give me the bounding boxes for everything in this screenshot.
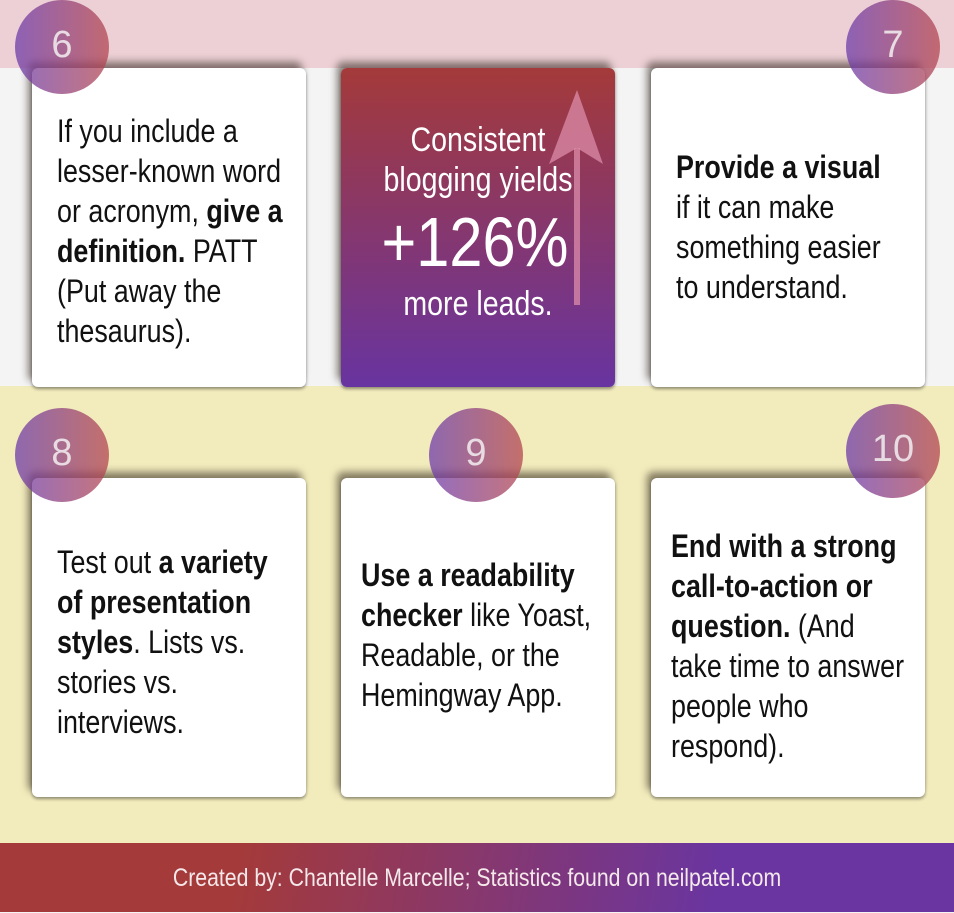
card 10: take time to answer [671, 648, 904, 684]
stat text [382, 121, 572, 323]
card 8: stories vs. [57, 664, 178, 700]
arrow [549, 90, 603, 305]
card 7: to understand. [676, 269, 848, 305]
card 7: Provide a visual [676, 149, 881, 185]
card 10 [651, 478, 925, 797]
card 8: styles. Lists vs. [57, 624, 245, 660]
card 8: Test out a variety [57, 544, 268, 580]
card 10: End with a strong [671, 528, 896, 564]
footer [0, 843, 954, 912]
top band [0, 0, 954, 68]
card 10: people who [671, 688, 808, 724]
card 10: respond). [671, 728, 785, 764]
card 8 [32, 478, 306, 797]
card 7 [651, 68, 925, 387]
circle 7: 7 [882, 24, 904, 66]
card 9: checker like Yoast, [361, 597, 591, 633]
card 10: call-to-action or [671, 568, 873, 604]
card 8: of presentation [57, 584, 251, 620]
card 6: definition. PATT [57, 233, 258, 269]
card 6: lesser-known word [57, 153, 281, 189]
stat card [341, 68, 615, 387]
circle 6: 6 [51, 24, 73, 66]
circle 9: 9 [465, 432, 487, 474]
card 7: if it can make [676, 189, 834, 225]
card 9: Use a readability [361, 557, 575, 593]
circle 7 [846, 0, 940, 94]
card 10: question. (And [671, 608, 855, 644]
circle 9 [429, 408, 523, 502]
circle 10 [846, 404, 940, 498]
footer: Created by: Chantelle Marcelle; Statistics found on neilpatel.com [173, 864, 781, 892]
stat text: Consistent [411, 121, 545, 159]
stat text: blogging yields [384, 161, 572, 199]
card 8: interviews. [57, 704, 184, 740]
circle 8: 8 [51, 432, 73, 474]
yellow band [0, 386, 954, 844]
card 9: Readable, or the [361, 637, 560, 673]
stat text: more leads. [403, 285, 553, 323]
card 6: If you include a [57, 113, 238, 149]
circle 10: 10 [872, 428, 914, 470]
card 6: (Put away the [57, 273, 221, 309]
circle 6 [15, 0, 109, 94]
card 7: something easier [676, 229, 881, 265]
circle 8 [15, 408, 109, 502]
card 9 [341, 478, 615, 797]
stat text: +126% [382, 203, 568, 281]
card 6: or acronym, give a [57, 193, 283, 229]
card 9: Hemingway App. [361, 677, 563, 713]
card 6 [32, 68, 306, 387]
card 6: thesaurus). [57, 313, 191, 349]
